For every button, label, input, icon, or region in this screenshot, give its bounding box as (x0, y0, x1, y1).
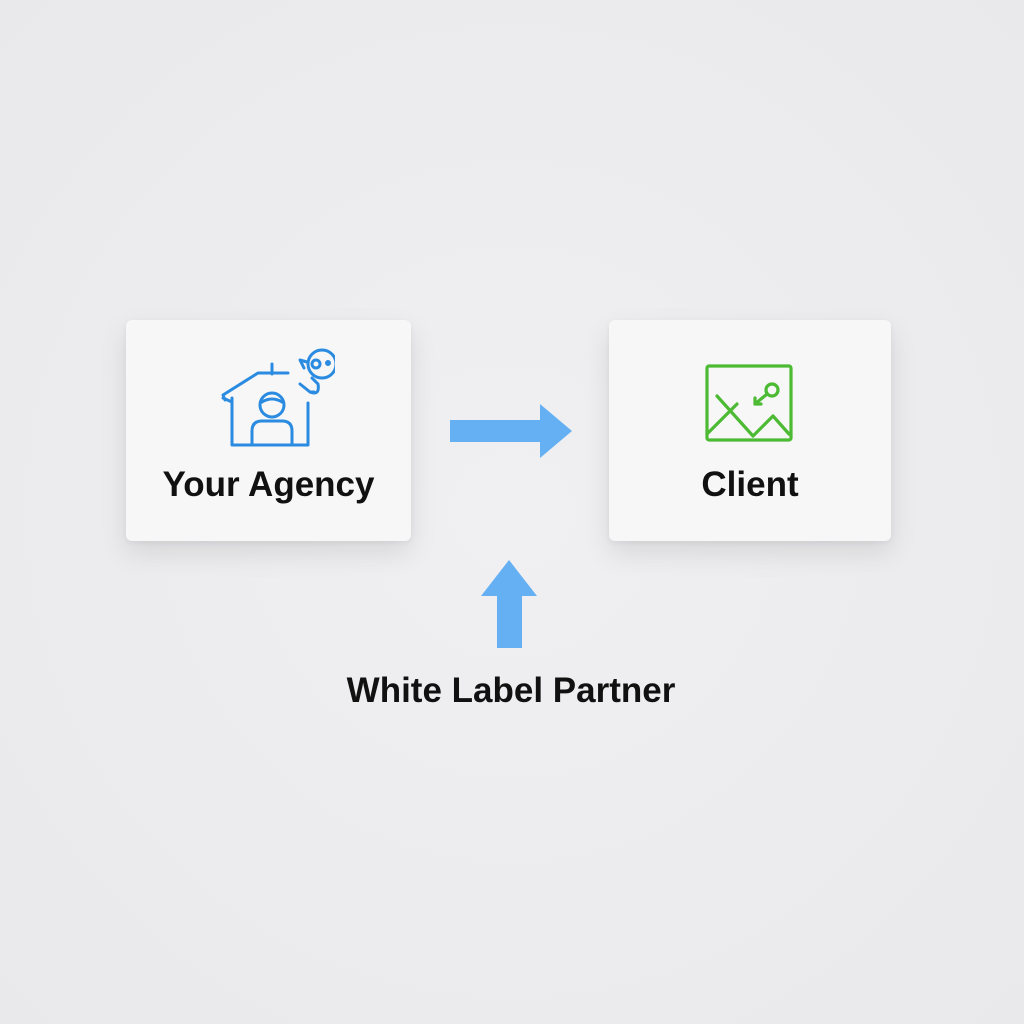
panel: your agency (126, 320, 411, 541)
icon: image picture (705, 364, 793, 442)
arrow: partner up (481, 560, 537, 648)
text: White Label Partner: White Label Partner (347, 671, 675, 710)
icon: agency house person (221, 348, 335, 446)
arrow: agency to client (450, 404, 572, 458)
text: Your Agency: Your Agency (162, 465, 374, 504)
panel: client (609, 320, 891, 541)
text: Client: Client (701, 465, 799, 504)
